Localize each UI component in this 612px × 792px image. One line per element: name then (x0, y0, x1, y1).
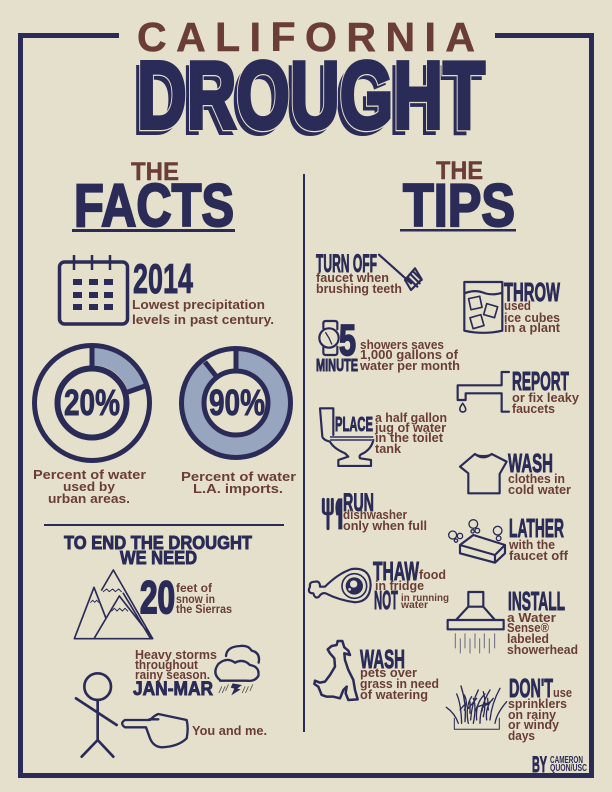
tip: run dishwasher: RUN (343, 489, 374, 517)
icon: toilet (320, 408, 373, 466)
tip: place jug in toilet: PLACE (335, 413, 373, 436)
fact: 2014: levels in past century. (132, 312, 274, 327)
tip: 5 minute showers: 1,000 gallons of (360, 347, 459, 362)
tip: install showerhead: Sense® (507, 620, 549, 635)
tip: throw ice cubes (464, 277, 561, 335)
tip: wash clothes: WASH (508, 448, 553, 478)
tip: wash pets: pets over (360, 665, 417, 680)
icon: toothbrush (379, 255, 422, 290)
tip: place jug in toilet: a half gallon (375, 410, 447, 425)
tip: lather: faucet off (509, 548, 569, 563)
title: Drought: DROUGHT (137, 42, 485, 149)
tip: install showerhead (448, 586, 578, 657)
icon: mountains (74, 570, 153, 639)
caption: 20 percent: Percent of water (33, 468, 146, 482)
tip: wash pets: WASH (360, 644, 405, 674)
tip: place jug in toilet: tank (375, 441, 402, 456)
tip: run dishwasher: dishwasher (343, 507, 407, 522)
heading: the tips (400, 157, 516, 239)
need: you and me: You and me. (192, 723, 267, 738)
tip: lather: LATHER (509, 513, 564, 543)
caption: 20 percent: used by (63, 480, 115, 494)
icon: showerhead (448, 592, 504, 653)
tip: run dishwasher: only when full (343, 518, 427, 533)
icon: dog (314, 641, 358, 700)
tip: turn off faucet: TURN OFF (316, 250, 377, 278)
tip: 5 minute showers: MINUTE (316, 355, 358, 375)
tip: report leaky faucets: faucets (512, 401, 555, 416)
tip: throw ice cubes: in a plant (504, 320, 561, 335)
credit (532, 752, 587, 777)
need: heavy storms (133, 646, 259, 700)
icon: t-shirt (460, 454, 507, 493)
caption: 20 percent (33, 468, 146, 506)
need: 20 feet of snow: snow in (176, 594, 215, 606)
credit: BY (532, 752, 547, 777)
chart: 20 percent donut: 20% (64, 382, 120, 423)
credit: QUON/USC (550, 763, 587, 774)
title: Drought: DROUGHT (137, 42, 485, 149)
tip: 5 minute showers: showers saves (360, 337, 444, 352)
tip: thaw food: in fridge (375, 578, 424, 593)
heading: the facts: FACTS (74, 172, 234, 239)
need: heavy storms: JAN-MAR (133, 679, 213, 700)
tip: don't use sprinklers: or windy (508, 717, 560, 732)
tip: wash clothes (460, 448, 571, 497)
tip: lather (449, 513, 569, 563)
icon: soap bar (449, 520, 505, 563)
tip: don't use sprinklers: on rainy (508, 707, 557, 722)
credit: CAMERON (550, 755, 583, 766)
tip: throw ice cubes: THROW (504, 277, 560, 307)
tip: wash pets: of watering (360, 687, 428, 702)
tip: thaw food: water (400, 600, 428, 611)
tip: 5 minute showers (316, 316, 460, 375)
caption: 90 percent: Percent of water (181, 470, 296, 484)
icon: grass (446, 686, 507, 729)
tip: don't use sprinklers: use (553, 685, 572, 700)
need: you and me (76, 673, 267, 757)
tip: install showerhead: a Water (507, 610, 556, 625)
title: California: CALIFORNIA (137, 14, 475, 60)
tip: report leaky faucets (458, 366, 580, 416)
icon: storm cloud (215, 646, 259, 695)
tip: thaw food: THAW (373, 556, 419, 586)
tip: place jug in toilet: jug of water (374, 420, 446, 435)
caption: 90 percent: L.A. imports. (193, 482, 283, 496)
tip: wash clothes: cold water (508, 482, 571, 497)
tip: install showerhead: showerhead (507, 642, 578, 657)
tip: turn off faucet: brushing teeth (316, 281, 402, 296)
title: Drought: DROUGHT (133, 47, 481, 154)
tip: wash pets: grass in need (360, 676, 439, 691)
tip: throw ice cubes: used (504, 298, 531, 313)
tip: don't use sprinklers: days (508, 728, 535, 743)
tip: report leaky faucets: or fix leaky (512, 390, 580, 405)
tip: throw ice cubes: ice cubes (504, 310, 560, 325)
heading: the tips: TIPS (403, 172, 515, 239)
tip: don't use sprinklers: DON'T (509, 673, 553, 703)
heading: to end the drought: TO END THE DROUGHT (64, 532, 253, 553)
caption: 20 percent: urban areas. (48, 492, 130, 506)
heading: the facts (72, 158, 235, 239)
need: heavy storms: Heavy storms (135, 647, 217, 662)
icon: pointing hand (122, 714, 188, 747)
need: heavy storms: rainy season. (135, 667, 210, 682)
tip: install showerhead: labeled (507, 631, 549, 646)
need: 20 feet of snow: 20 (140, 572, 175, 623)
need: heavy storms: throughout (135, 657, 199, 672)
tip: 5 minute showers: 5 (339, 316, 356, 365)
icon: faucet (458, 372, 509, 412)
icon: calendar (60, 255, 128, 324)
tip: run dishwasher (323, 489, 427, 533)
heading: to end the drought (64, 532, 253, 568)
tip: wash clothes: clothes in (508, 471, 565, 486)
tip: thaw food: food (419, 567, 446, 582)
tip: don't use sprinklers: sprinklers (508, 696, 567, 711)
icon: glass with ice (464, 282, 502, 333)
tip: thaw food (309, 556, 449, 615)
heading: to end the drought: WE NEED (120, 547, 197, 568)
chart: 90 percent donut: 90% (209, 382, 265, 423)
heading: the facts: THE (131, 158, 179, 186)
tip: place jug in toilet (320, 408, 447, 466)
tip: 5 minute showers: water per month (359, 358, 460, 373)
icon: ham (309, 569, 371, 602)
chart: 20 percent donut (34, 346, 150, 460)
fact: 2014: Lowest precipitation (132, 297, 265, 312)
tip: turn off faucet: faucet when (316, 270, 389, 285)
fact: 2014: 2014 (133, 255, 193, 302)
need: 20 feet of snow: the Sierras (176, 604, 232, 616)
tip: lather: with the (508, 537, 555, 552)
tip: don't use sprinklers (446, 673, 572, 743)
fact: 2014 (60, 255, 274, 327)
tip: turn off faucet (316, 250, 422, 296)
chart: 90 percent donut (182, 348, 290, 458)
icon: watch (319, 321, 339, 355)
tip: wash pets (314, 641, 439, 702)
tip: thaw food: in running (401, 593, 449, 604)
tip: thaw food: NOT (374, 585, 398, 615)
icon: stick figure (76, 673, 117, 757)
caption: 90 percent (181, 470, 296, 496)
heading: the tips: THE (436, 157, 483, 185)
need: 20 feet of snow (74, 570, 232, 639)
tip: place jug in toilet: in the toilet (375, 430, 444, 445)
icon: fork and knife (323, 498, 342, 529)
need: 20 feet of snow: feet of (176, 583, 212, 595)
